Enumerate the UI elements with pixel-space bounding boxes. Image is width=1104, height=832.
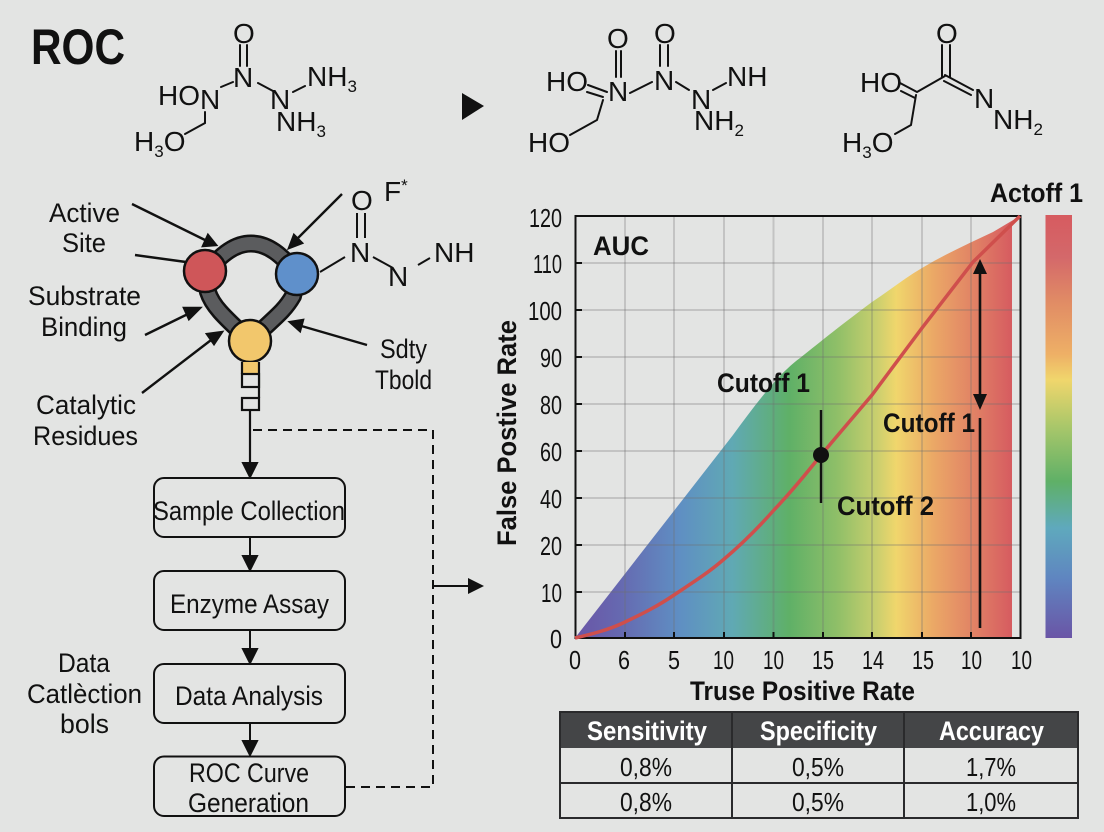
- labels: enzyme callouts: Active: [49, 198, 120, 228]
- labels: enzyme callouts: [28, 198, 432, 451]
- x axis labels: 15: [912, 645, 934, 675]
- label: data collection tools: Catlèction: [27, 679, 142, 709]
- molecule: second structure: HO: [546, 66, 588, 97]
- chart annotations: Cutoff 2: [837, 491, 934, 521]
- table header: Specificity: [760, 716, 877, 746]
- diagram: enzyme active site: [184, 244, 318, 470]
- label: data collection tools: bols: [60, 709, 109, 739]
- molecule: second structure: N: [654, 65, 674, 96]
- molecule: bound ligand: [320, 176, 474, 292]
- chart annotations: AUC: [593, 231, 649, 261]
- title: ROC: [31, 19, 125, 75]
- x axis labels: 15: [812, 645, 834, 675]
- y axis labels: [528, 203, 562, 654]
- table row 2: 0,5%: [792, 787, 844, 817]
- step: enzyme assay: [154, 571, 345, 630]
- grid lines: [576, 217, 1020, 638]
- molecule: second structure: N: [608, 76, 628, 107]
- arrows: enzyme callouts: [132, 194, 367, 393]
- y axis labels: 90: [540, 343, 562, 373]
- y axis labels: 60: [540, 437, 562, 467]
- stem: [242, 362, 259, 470]
- molecule: first structure: O: [233, 18, 255, 49]
- molecule: second structure: O: [654, 18, 676, 49]
- flowchart: [153, 463, 345, 818]
- molecule: bound ligand: NH: [434, 237, 474, 268]
- connector arrows: [243, 463, 257, 755]
- y axis labels: 80: [540, 390, 562, 420]
- table row 1: 0,8%: [620, 752, 672, 782]
- table header: Sensitivity: [587, 716, 707, 746]
- cutoff marker: [813, 410, 829, 503]
- table row 1: [620, 752, 1016, 782]
- color bar: [1046, 215, 1072, 638]
- x axis labels: 10: [713, 645, 734, 675]
- molecule: first structure: 3: [154, 142, 164, 161]
- molecule: third structure: N: [974, 83, 994, 114]
- x axis labels: 0: [569, 645, 581, 675]
- step: roc curve generation: ROC Curve: [189, 758, 309, 788]
- table row 1: 0,5%: [792, 752, 844, 782]
- step: roc curve generation: [154, 756, 345, 818]
- x axis labels: 10: [763, 645, 784, 675]
- table row 2: [620, 787, 1016, 817]
- y axis labels: 40: [540, 484, 562, 514]
- y axis title: False Postive Rate: [492, 320, 522, 546]
- chart annotations: Actoff 1: [990, 178, 1083, 208]
- molecule: first structure: HO: [158, 80, 200, 111]
- labels: enzyme callouts: Site: [62, 228, 106, 258]
- molecule: third structure: 2: [1033, 120, 1043, 139]
- roc curve: [575, 216, 1020, 638]
- molecule: first structure: N: [233, 62, 253, 93]
- y axis labels: 20: [540, 531, 562, 561]
- gradient area: [575, 216, 1020, 638]
- molecule: first structure: 3: [316, 122, 326, 141]
- axes frame: [576, 216, 1020, 638]
- icon: red residue: [184, 250, 226, 292]
- chart: ROC curve: [492, 178, 1083, 706]
- labels: enzyme callouts: Sdty: [380, 334, 427, 364]
- chart annotations: Cutoff 1: [883, 408, 975, 438]
- molecule: third structure: HO: [860, 67, 902, 98]
- y axis labels: 10: [541, 578, 562, 608]
- table grid: [560, 712, 1078, 818]
- label: data collection tools: [27, 648, 142, 739]
- molecule: third structure: O: [936, 18, 958, 49]
- dashed connector: [248, 430, 433, 787]
- table header: [560, 712, 1078, 748]
- molecule: second structure: HO: [528, 127, 570, 158]
- x axis labels: 10: [1011, 645, 1032, 675]
- molecule: third structure: NH: [993, 104, 1033, 135]
- molecule: bound ligand: N: [350, 237, 370, 268]
- tick marks: [576, 263, 971, 638]
- molecule: first structure: N: [270, 84, 290, 115]
- double arrow: [973, 259, 987, 628]
- chart annotations: [593, 178, 1083, 521]
- molecule: first structure: H: [134, 126, 154, 157]
- x axis title: Truse Positive Rate: [690, 676, 915, 706]
- y axis labels: 110: [533, 249, 562, 279]
- table row 1: 1,7%: [966, 752, 1016, 782]
- arrow: to chart: [433, 578, 484, 594]
- x axis labels: 6: [618, 645, 630, 675]
- molecule: first structure: NH: [276, 106, 316, 137]
- table header: Accuracy: [939, 716, 1044, 746]
- labels: enzyme callouts: Binding: [41, 312, 127, 342]
- molecule: second structure: O: [607, 23, 629, 54]
- y axis labels: 100: [528, 296, 562, 326]
- labels: enzyme callouts: Catalytic: [36, 390, 136, 420]
- molecule: second structure: N: [691, 84, 711, 115]
- y axis labels: 120: [529, 203, 562, 233]
- x axis labels: 14: [862, 645, 884, 675]
- molecule: first structure: NH: [307, 61, 347, 92]
- arrow: reaction: [462, 93, 484, 120]
- molecule: first structure: 3: [347, 77, 357, 96]
- molecule: second structure: NH: [694, 105, 734, 136]
- x axis labels: [569, 645, 1032, 675]
- step: sample collection: Sample Collection: [153, 496, 345, 526]
- molecule: first structure: N: [200, 84, 220, 115]
- step: roc curve generation: Generation: [188, 788, 309, 818]
- icon: yellow residue: [229, 320, 271, 362]
- molecule: first structure: [134, 18, 357, 161]
- molecule: third structure: 3: [862, 143, 872, 162]
- molecule: bound ligand: N: [388, 261, 408, 292]
- label: data collection tools: Data: [58, 648, 111, 678]
- step: data analysis: [154, 664, 345, 723]
- table: metrics: [560, 712, 1078, 818]
- molecule: second structure: 2: [734, 121, 744, 140]
- molecule: bound ligand: F: [384, 176, 401, 207]
- labels: enzyme callouts: Tbold: [375, 365, 432, 395]
- molecule: third structure: H: [842, 127, 862, 158]
- x axis labels: 5: [668, 645, 680, 675]
- molecule: bound ligand: O: [351, 185, 373, 216]
- molecule: second structure: [528, 18, 767, 158]
- enzyme ring: [207, 244, 297, 341]
- x axis labels: 10: [961, 645, 982, 675]
- icon: blue residue: [276, 253, 318, 295]
- table row 2: 1,0%: [966, 787, 1016, 817]
- step: data analysis: Data Analysis: [175, 681, 323, 711]
- step: enzyme assay: Enzyme Assay: [170, 589, 329, 619]
- molecule: third structure: [842, 18, 1043, 162]
- molecule: second structure: NH: [727, 61, 767, 92]
- molecule: third structure: O: [872, 127, 893, 158]
- chart annotations: Cutoff 1: [717, 368, 810, 398]
- labels: enzyme callouts: Residues: [33, 421, 138, 451]
- labels: enzyme callouts: Substrate: [28, 281, 141, 311]
- molecule: bound ligand: *: [401, 176, 408, 195]
- molecule: first structure: O: [164, 126, 185, 157]
- table row 2: 0,8%: [620, 787, 672, 817]
- step: sample collection: [153, 478, 345, 537]
- y axis labels: 0: [550, 624, 562, 654]
